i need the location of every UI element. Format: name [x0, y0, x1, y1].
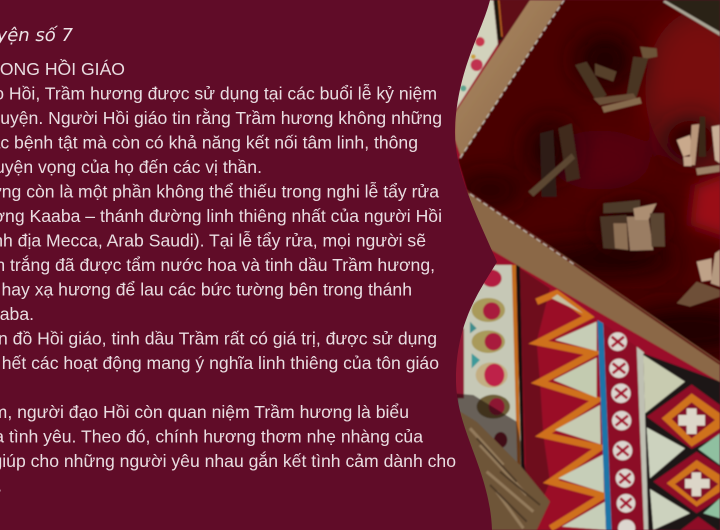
red zigzag column: [520, 269, 585, 518]
circle column: [603, 323, 645, 530]
agarwood pile middle: [528, 123, 580, 197]
felt box interior: [450, 0, 720, 370]
lower wooden edge of box: [467, 190, 720, 382]
agarwood pile lower right: [677, 250, 720, 307]
paragraph 4: [0, 402, 456, 496]
paragraph 3: hết các hoạt động mang ý nghĩa linh thiêng của tôn giáo: [2, 353, 439, 373]
paragraph 1: [0, 82, 442, 177]
cross motifs: [678, 408, 705, 434]
blue stripe: [597, 320, 613, 530]
right diamond band: [643, 353, 720, 530]
paragraph 2: [0, 180, 442, 324]
lower carpet pattern: [453, 265, 720, 530]
shadow over carpet: [456, 393, 527, 472]
photo: incense box on patterned carpet: [450, 0, 720, 530]
floral strip motifs: [470, 270, 510, 448]
orange and black stripes: [512, 265, 521, 465]
white triangles: [555, 322, 597, 351]
article text: [0, 58, 456, 496]
base carpet: [455, 44, 718, 382]
top-left carpet corner: [456, 0, 530, 110]
paragraph 4: giúp cho những người yêu nhau gắn kết tình cảm dành cho: [0, 450, 456, 471]
orange zigzag: [537, 293, 603, 528]
white stripe: [635, 346, 650, 530]
agarwood pile top: [575, 47, 657, 113]
paragraph 3: [0, 328, 439, 373]
fur: [455, 408, 550, 530]
agarwood pile bottom: [600, 200, 665, 251]
paragraph 3: tín đồ Hồi giáo, tinh dầu Trầm rất có giá trị, được sử dụng: [0, 328, 437, 348]
agarwood pile right: [677, 117, 720, 175]
paragraph 2: hay xạ hương để lau các bức tường bên trong thánh: [1, 280, 412, 300]
top right corner of box: [667, 0, 720, 32]
upper-left wooden edge of box: [455, 0, 563, 157]
incense pile shadows: [526, 32, 718, 249]
